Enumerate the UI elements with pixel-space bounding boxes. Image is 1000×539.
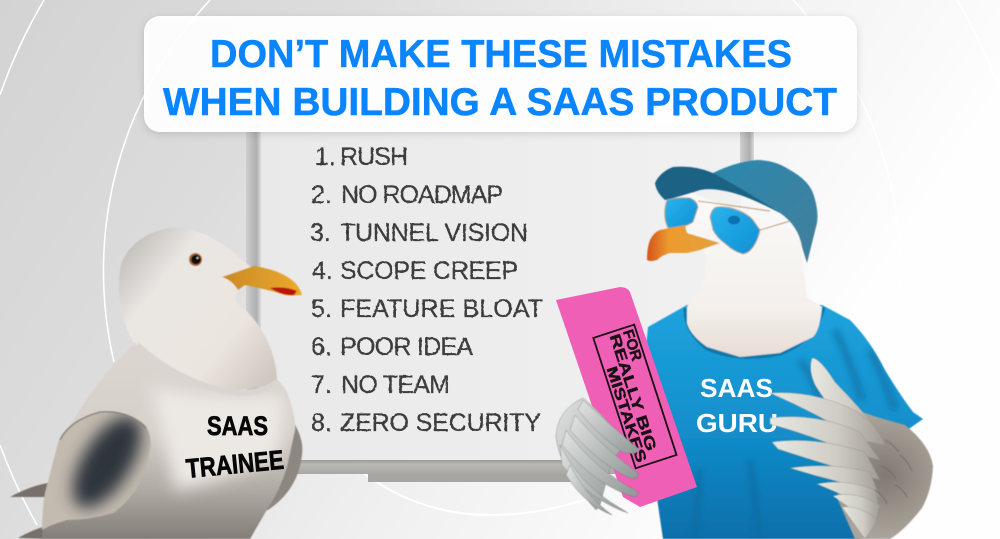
shirt folds [695,330,895,539]
eraser line 3: MISTAKES [603,364,650,465]
shirt collar [137,345,277,393]
eraser label [592,325,677,469]
label line 1: SAAS [700,373,773,403]
label line 1: SAAS [207,411,268,441]
handwritten list of mistakes [310,143,543,437]
item 6: POOR IDEA [340,333,473,361]
body dark edge [240,410,302,520]
sunglasses [665,198,790,254]
item 1: RUSH [340,143,408,171]
item 1: 1. [315,143,336,171]
tail feathers [10,483,60,539]
cap crown [713,160,818,263]
title line 2: WHEN BUILDING A SAAS PRODUCT [163,81,837,124]
wing coverts [875,440,912,504]
item 7: NO TEAM [341,371,450,399]
item 7: 7. [311,371,332,399]
neck and head [667,190,822,357]
item 4: 4. [312,257,333,285]
beak [647,225,720,261]
item 3: TUNNEL VISION [340,219,528,247]
label line 2: GURU [696,408,778,438]
guru wing, right [770,358,933,539]
character: SaaS trainee gull [10,228,302,539]
item 2: 2. [311,181,332,209]
head and neck [119,228,277,395]
title panel [144,16,857,132]
beak [222,266,302,296]
item 5: FEATURE BLOAT [340,295,543,323]
character: SaaS guru gull [644,160,923,539]
pink eraser [556,287,697,507]
right lens [710,207,760,254]
eye behind lens [728,216,740,224]
eye [189,253,202,266]
title line 1: DON’T MAKE THESE MISTAKES [210,33,792,76]
wing mass [835,400,933,539]
left lens [665,198,698,228]
feathers [770,358,885,539]
label line 2: TRAINEE [185,445,285,484]
item 3: 3. [310,219,331,247]
item 2: NO ROADMAP [341,181,503,209]
shirt label: SAAS TRAINEE [185,411,285,484]
cap brim [655,167,780,213]
shirt [42,343,295,539]
t-shirt [644,305,923,539]
item 8: 8. [311,409,332,437]
eraser line 1: FOR [619,328,645,363]
item 6: 6. [311,333,332,361]
shirt collar [686,307,823,357]
eraser line 2: REALLY BIG [606,332,660,453]
eraser body [556,287,697,507]
shirt label: SAAS GURU [696,373,778,438]
shirt highlight [150,385,285,490]
item 5: 5. [311,295,332,323]
item 8: ZERO SECURITY [340,409,541,437]
item 4: SCOPE CREEP [340,257,518,285]
sleeve seam [60,412,146,440]
whiteboard [246,125,754,482]
glasses bridge and arm [698,201,790,230]
guru wing, left [556,398,640,515]
wing [42,412,151,530]
